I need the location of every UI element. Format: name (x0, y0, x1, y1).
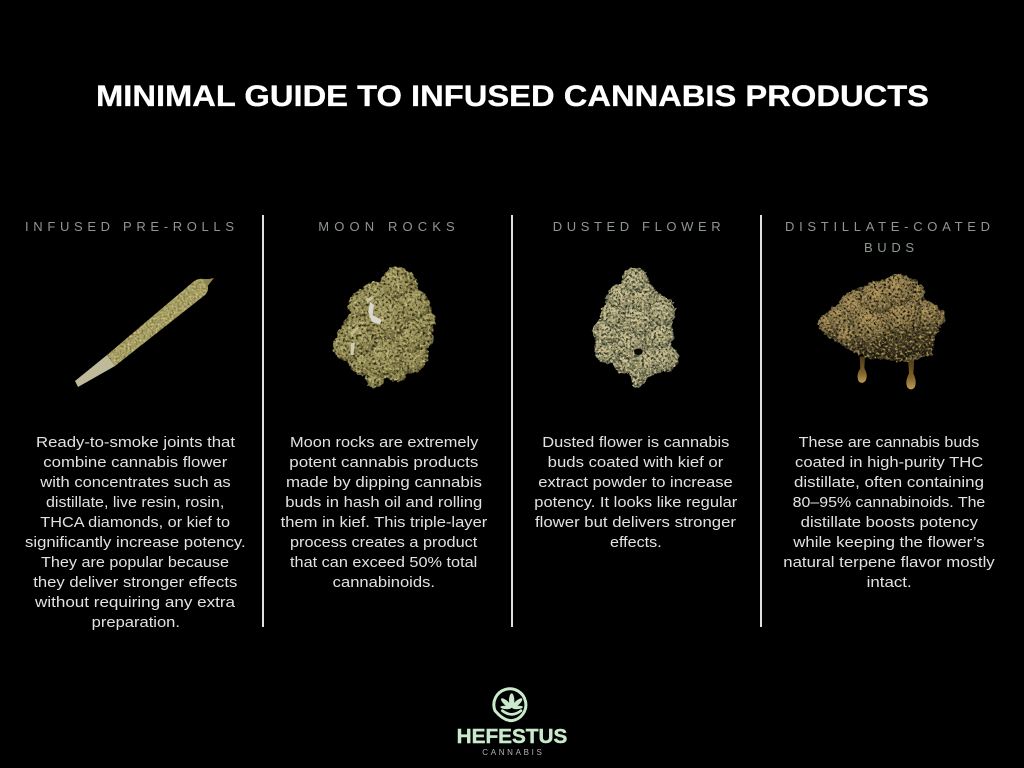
text: distillate-coated buds description: natural terpene flavor mostly (783, 554, 995, 571)
text: distillate-coated buds description: distillate boosts potency (801, 514, 979, 531)
text: distillate-coated buds description: intact. (867, 574, 912, 591)
text: pre-rolls description: distillate, live resin, rosin, (46, 494, 224, 511)
text: pre-rolls description: significantly increase potency. (25, 534, 246, 551)
text: pre-rolls description: without requiring any extra (34, 594, 236, 611)
heading: distillate-coated buds: BUDS (864, 240, 914, 255)
panel: distillate-coated buds (783, 219, 995, 591)
text: dusted flower description: buds coated with kief or (548, 454, 723, 471)
icon: distillate-coated bud with drips (818, 274, 945, 389)
text: pre-rolls description: preparation. (92, 614, 180, 631)
text: pre-rolls description (25, 434, 246, 631)
icon: dusted flower bud (593, 267, 678, 388)
heading: dusted flower: DUSTED FLOWER (553, 219, 721, 234)
text: pre-rolls description: They are popular because (41, 554, 229, 571)
column divider 3 (760, 215, 762, 627)
text: distillate-coated buds description: 80–95% cannabinoids. The (793, 494, 985, 511)
text: dusted flower description (534, 434, 737, 551)
column divider 2 (511, 215, 513, 627)
panel: moon rocks (281, 219, 487, 591)
icon: moon rock bud (333, 267, 435, 388)
text: moon rocks description: potent cannabis products (289, 454, 478, 471)
text: dusted flower description: flower but delivers stronger (535, 514, 736, 531)
text: moon rocks description: process creates a product (290, 534, 478, 551)
panel: dusted flower (534, 219, 737, 551)
sub-wordmark: CANNABIS (482, 748, 542, 757)
text: dusted flower description: Dusted flower is cannabis (542, 434, 729, 451)
text: dusted flower description: potency. It looks like regular (534, 494, 737, 511)
text: pre-rolls description: Ready-to-smoke joints that (36, 434, 236, 451)
text: distillate-coated buds description: coated in high-purity THC (795, 454, 983, 471)
column divider 1 (262, 215, 264, 627)
icon: leaf and smile emblem (494, 689, 526, 721)
text: dusted flower description: extract powder to increase (538, 474, 733, 491)
text: distillate-coated buds description: while keeping the flower’s (792, 534, 985, 551)
heading: moon rocks: MOON ROCKS (318, 219, 455, 234)
text: distillate-coated buds description (783, 434, 995, 591)
heading: distillate-coated buds (785, 219, 990, 255)
text: pre-rolls description: with concentrates such as (39, 474, 231, 491)
text: moon rocks description: them in kief. This triple-layer (281, 514, 487, 531)
text: moon rocks description: Moon rocks are extremely (290, 434, 479, 451)
text: distillate-coated buds description: distillate, often containing (794, 474, 984, 491)
heading: distillate-coated buds: DISTILLATE-COATED (785, 219, 990, 234)
text: dusted flower description: effects. (610, 534, 662, 551)
title: MINIMAL GUIDE TO INFUSED CANNABIS PRODUCTS (96, 80, 929, 113)
text: moon rocks description: buds in hash oil and rolling (285, 494, 482, 511)
icon: pre-roll joint (75, 278, 214, 387)
logo: Hefestus Cannabis (457, 689, 567, 757)
text: moon rocks description: that can exceed 50% total (290, 554, 477, 571)
text: pre-rolls description: they deliver stronger effects (33, 574, 237, 591)
text: moon rocks description: made by dipping cannabis (286, 474, 482, 491)
heading: infused pre-rolls: INFUSED PRE-ROLLS (25, 219, 234, 234)
text: distillate-coated buds description: These are cannabis buds (799, 434, 979, 451)
panel: infused pre-rolls (25, 219, 246, 631)
text: moon rocks description (281, 434, 487, 591)
text: pre-rolls description: THCA diamonds, or kief to (40, 514, 230, 531)
wordmark: HEFESTUS (457, 726, 567, 748)
text: moon rocks description: cannabinoids. (333, 574, 435, 591)
text: pre-rolls description: combine cannabis flower (43, 454, 227, 471)
